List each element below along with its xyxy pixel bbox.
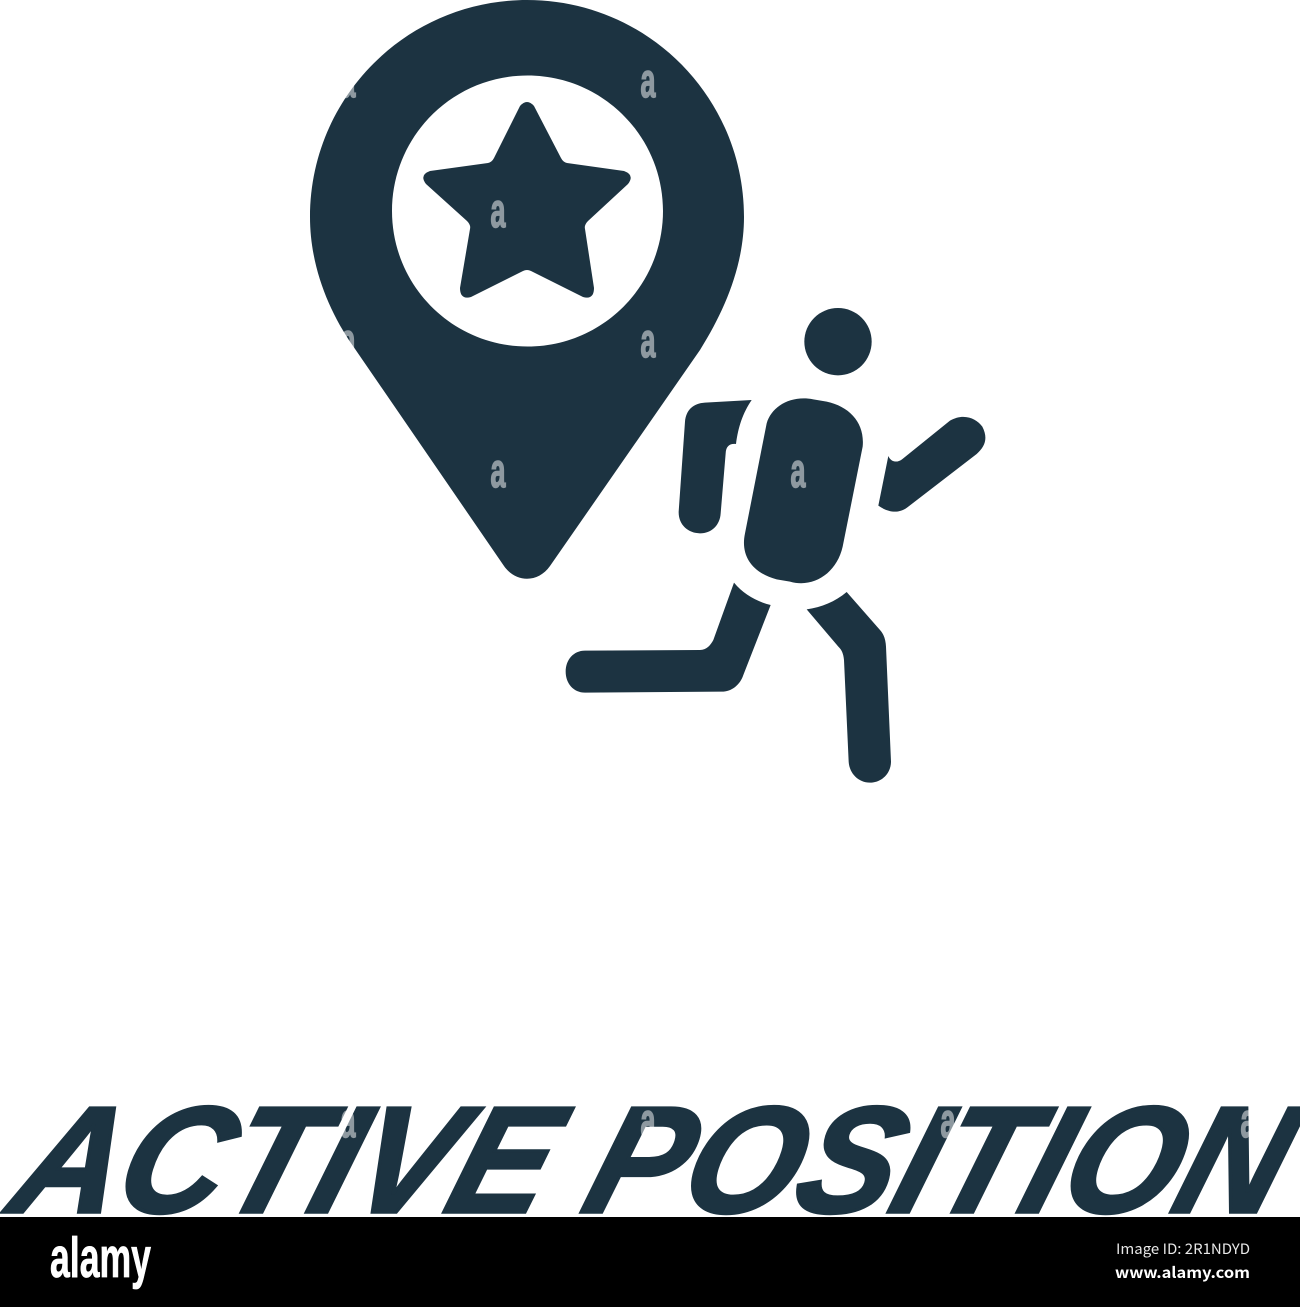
footer band <box>0 1217 1300 1307</box>
watermark letters: a <box>640 55 656 108</box>
icon: running person with backpack <box>566 308 985 783</box>
watermark letters: a <box>640 1095 656 1148</box>
watermark letters: a <box>490 185 506 238</box>
watermark letters: a <box>940 1095 956 1148</box>
icon: map pin with star <box>310 0 744 579</box>
watermark letters <box>340 55 1256 1148</box>
watermark letters: a <box>1240 1095 1256 1148</box>
watermark letters: a <box>640 315 656 368</box>
alamy logo: alamy <box>50 1226 151 1290</box>
watermark letters: a <box>490 445 506 498</box>
watermark letters: a <box>340 1095 356 1148</box>
image id: Image ID: 2R1NDYD <box>1116 1238 1250 1259</box>
watermark letters: a <box>790 445 806 498</box>
watermark letters: a <box>340 315 356 368</box>
website: www.alamy.com <box>1115 1262 1250 1283</box>
watermark letters: a <box>340 55 356 108</box>
